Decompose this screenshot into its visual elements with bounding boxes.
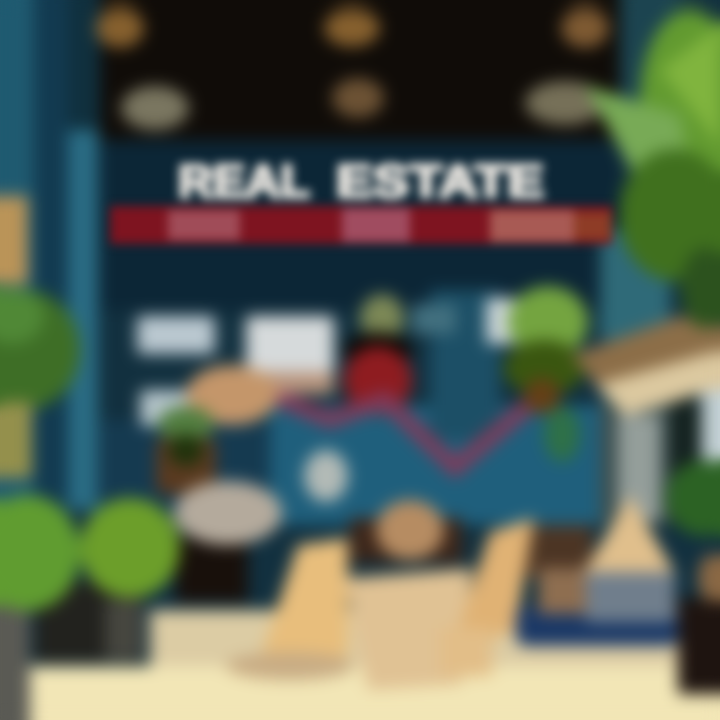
tan wooden beam (572, 316, 720, 416)
sign title: ESTATE (336, 155, 544, 207)
right window and shelf (600, 385, 720, 525)
dark plant pot right (678, 554, 720, 694)
zigzag chart line (270, 395, 535, 468)
wooden chairs and table (226, 518, 534, 690)
small central plant (156, 406, 216, 494)
red banner (110, 206, 612, 244)
palm plant top right (585, 10, 720, 328)
sign content blocks (137, 294, 530, 426)
wall panels (100, 140, 670, 525)
right lower plant (666, 460, 720, 536)
left blue column (0, 0, 98, 510)
sign banner and title (110, 155, 612, 244)
blue sofa (516, 568, 678, 646)
white table items (174, 450, 676, 575)
red central mark (344, 332, 412, 414)
hanging plant right centre (504, 286, 588, 462)
tan centre object (186, 365, 334, 425)
hanging lights (96, 8, 609, 130)
sign title (178, 155, 544, 207)
dark ceiling (100, 0, 620, 140)
floor (0, 610, 720, 720)
lower left plants (0, 495, 180, 720)
left wooden post (0, 196, 28, 284)
sign title: REAL (178, 155, 310, 207)
dark lower furniture (176, 518, 592, 602)
left hanging plant (0, 288, 80, 478)
